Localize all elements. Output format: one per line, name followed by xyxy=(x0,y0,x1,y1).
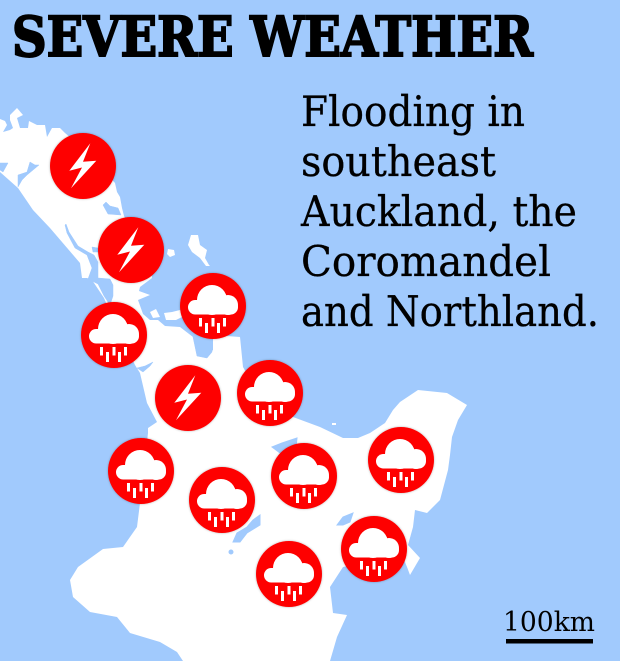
Lake Taupo xyxy=(233,515,260,542)
Lake Rotoaira xyxy=(229,550,233,554)
Lake Waikaremoana xyxy=(337,513,353,525)
description text: Auckland, the xyxy=(300,187,577,236)
Whale Island xyxy=(332,423,336,425)
icon: rain 2 xyxy=(81,302,147,368)
Manukau Harbour xyxy=(137,362,153,372)
Waiheke Island xyxy=(150,309,160,318)
description text: and Northland. xyxy=(301,287,599,336)
north-west notch xyxy=(0,163,8,172)
Bay of Islands inlet xyxy=(103,202,121,215)
title: SEVERE WEATHER xyxy=(12,4,534,69)
map: North Island xyxy=(0,108,467,661)
icon: lightning 2 xyxy=(98,217,164,283)
Little Barrier Island xyxy=(167,249,175,257)
description text: Coromandel xyxy=(301,237,551,286)
Kaipara Harbour xyxy=(65,224,113,305)
icon: rain 3 xyxy=(237,360,303,426)
Hokianga Harbour xyxy=(18,162,39,187)
icon: rain 8 xyxy=(341,516,407,582)
scale bar xyxy=(506,639,593,644)
description text: southeast xyxy=(301,137,496,186)
icon: rain 5 xyxy=(189,467,255,533)
Hauraki islands xyxy=(164,310,184,320)
icon: rain 4 xyxy=(108,438,174,504)
icon: rain 7 xyxy=(368,427,434,493)
icon: rain 6 xyxy=(271,443,337,509)
icon: lightning 3 xyxy=(155,365,221,431)
Tauranga Harbour xyxy=(272,438,297,453)
Kaipara side arm xyxy=(92,247,98,252)
water inlets and lakes xyxy=(0,162,353,554)
icon: lightning 1 xyxy=(50,133,116,199)
description text xyxy=(300,87,599,336)
description text: Flooding in xyxy=(301,87,525,136)
Great Barrier Island xyxy=(188,235,210,266)
icon: rain 9 xyxy=(256,541,322,607)
icon: rain 1 xyxy=(180,273,246,339)
land mass xyxy=(0,108,467,661)
scale label: 100km xyxy=(503,607,595,638)
Firth of Thames xyxy=(193,335,212,358)
